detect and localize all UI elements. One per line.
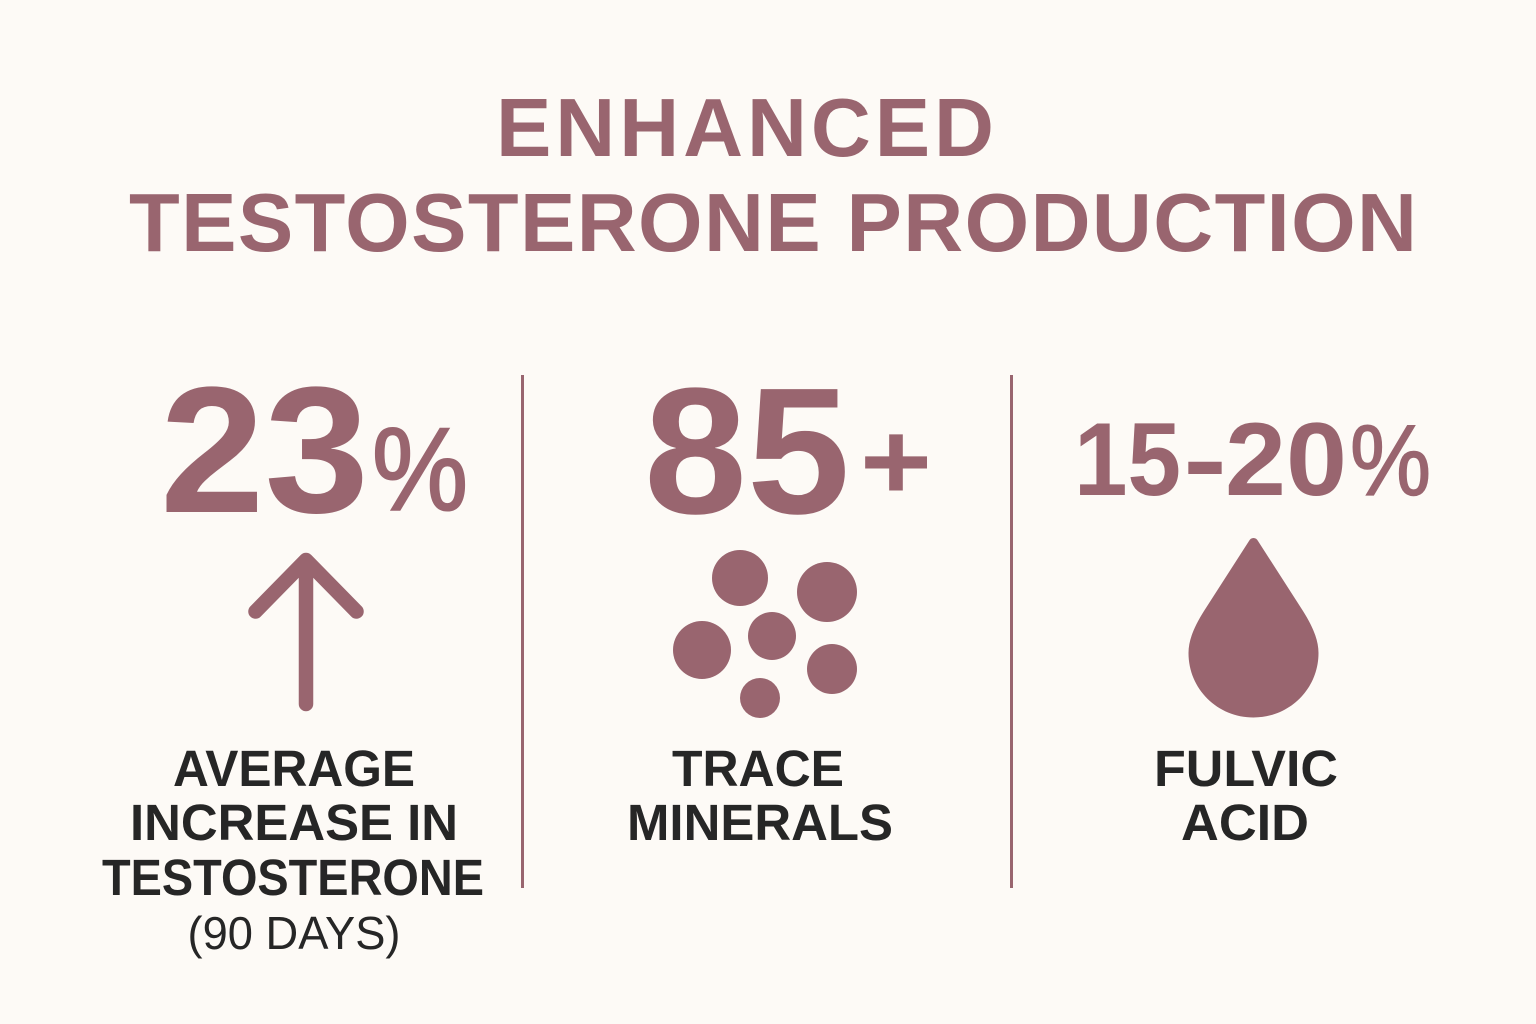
divider right: [1010, 375, 1013, 888]
icon: up arrow: [256, 560, 356, 704]
label: average increase: TESTOSTERONE: [102, 849, 484, 906]
stat: 15-20%: [1074, 402, 1431, 519]
label: average increase: [102, 740, 484, 959]
label: fulvic acid: FULVIC: [1154, 740, 1338, 797]
divider left: [521, 375, 524, 888]
label: average increase: AVERAGE: [173, 740, 415, 797]
panel: fulvic acid: [1074, 402, 1431, 851]
stat: 15-20%: –: [1187, 403, 1223, 519]
label: average increase: (90 DAYS): [188, 907, 400, 959]
icon: mineral dots: [673, 550, 857, 718]
stat: 15-20%: 20: [1225, 402, 1347, 518]
label: trace minerals: TRACE: [672, 740, 844, 797]
title: TESTOSTERONE PRODUCTION: [129, 176, 1417, 269]
panel: 85+: [627, 351, 932, 851]
stat: 23%: 23: [160, 350, 369, 551]
stat: 85+: 85: [644, 351, 850, 552]
title: ENHANCED: [496, 81, 994, 174]
stat: 15-20%: %: [1350, 405, 1431, 517]
label: fulvic acid: ACID: [1181, 794, 1309, 851]
label: trace minerals: MINERALS: [627, 794, 893, 851]
stat: 85+: [644, 351, 932, 552]
panel: 23 percent: [102, 350, 484, 959]
stat: 23%: [160, 350, 468, 551]
label: fulvic acid: [1154, 740, 1338, 851]
stat: 85+: +: [860, 400, 932, 523]
title: [129, 81, 1417, 269]
label: trace minerals: [627, 740, 893, 851]
stat: 23%: %: [372, 404, 468, 536]
label: average increase: INCREASE IN: [130, 794, 458, 851]
stat: 15-20%: 15: [1074, 402, 1181, 518]
icon: droplet: [1188, 538, 1318, 718]
